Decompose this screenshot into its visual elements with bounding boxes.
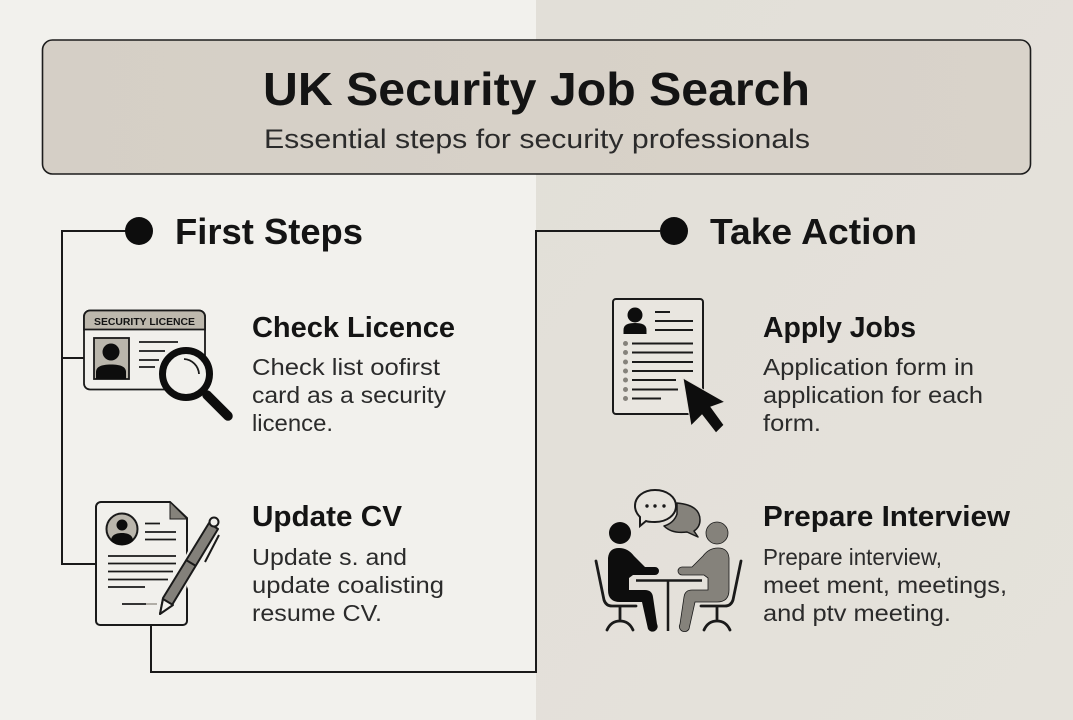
subtitle: Essential steps for security professionals (264, 124, 810, 154)
text block: Check Licence: Check Licence (252, 312, 455, 344)
text block: Apply Jobs (763, 312, 983, 436)
text block: Prepare Interview (763, 501, 1011, 626)
person: left (608, 522, 659, 632)
icon: security licence card with magnifier (84, 310, 228, 416)
icon: interview at table with speech bubbles (596, 490, 741, 632)
icon: application form with cursor (613, 299, 725, 433)
text block: Update CV: Update s. and (252, 544, 407, 570)
text block: Update CV (252, 501, 444, 626)
text block: Prepare Interview: meet ment, meetings, (763, 572, 1007, 598)
text block: Apply Jobs: Application form in (763, 354, 974, 380)
header panel (42, 40, 1030, 174)
person: right (678, 522, 729, 632)
text block: Check Licence: card as a security (252, 382, 447, 408)
text block: Update CV: update coalisting (252, 572, 444, 598)
icon: security licence card with magnifier: SECURITY LICENCE (94, 316, 195, 328)
text block: Check Licence: licence. (252, 410, 333, 436)
text block: Check Licence: Check list oofirst (252, 354, 441, 380)
text block: Update CV: Update CV (252, 501, 402, 533)
text block: Apply Jobs: Apply Jobs (763, 312, 916, 344)
text block: Prepare Interview: Prepare interview, (763, 544, 942, 570)
icon: CV document with pen (96, 502, 219, 625)
speech bubble: white (635, 490, 676, 526)
speech bubble: grey (664, 503, 700, 537)
text block: Prepare Interview: Prepare Interview (763, 501, 1011, 533)
connector lines (62, 231, 660, 672)
text block: Prepare Interview: and ptv meeting. (763, 600, 951, 626)
section heading: First Steps: First Steps (175, 211, 363, 252)
text block: Apply Jobs: application for each (763, 382, 983, 408)
text block: Update CV: resume CV. (252, 600, 382, 626)
text block: Apply Jobs: form. (763, 410, 821, 436)
title: UK Security Job Search (263, 63, 810, 115)
chairs (596, 561, 741, 630)
text block: Check Licence (252, 312, 455, 436)
table (636, 580, 702, 631)
section heading: Take Action: Take Action (710, 211, 917, 252)
